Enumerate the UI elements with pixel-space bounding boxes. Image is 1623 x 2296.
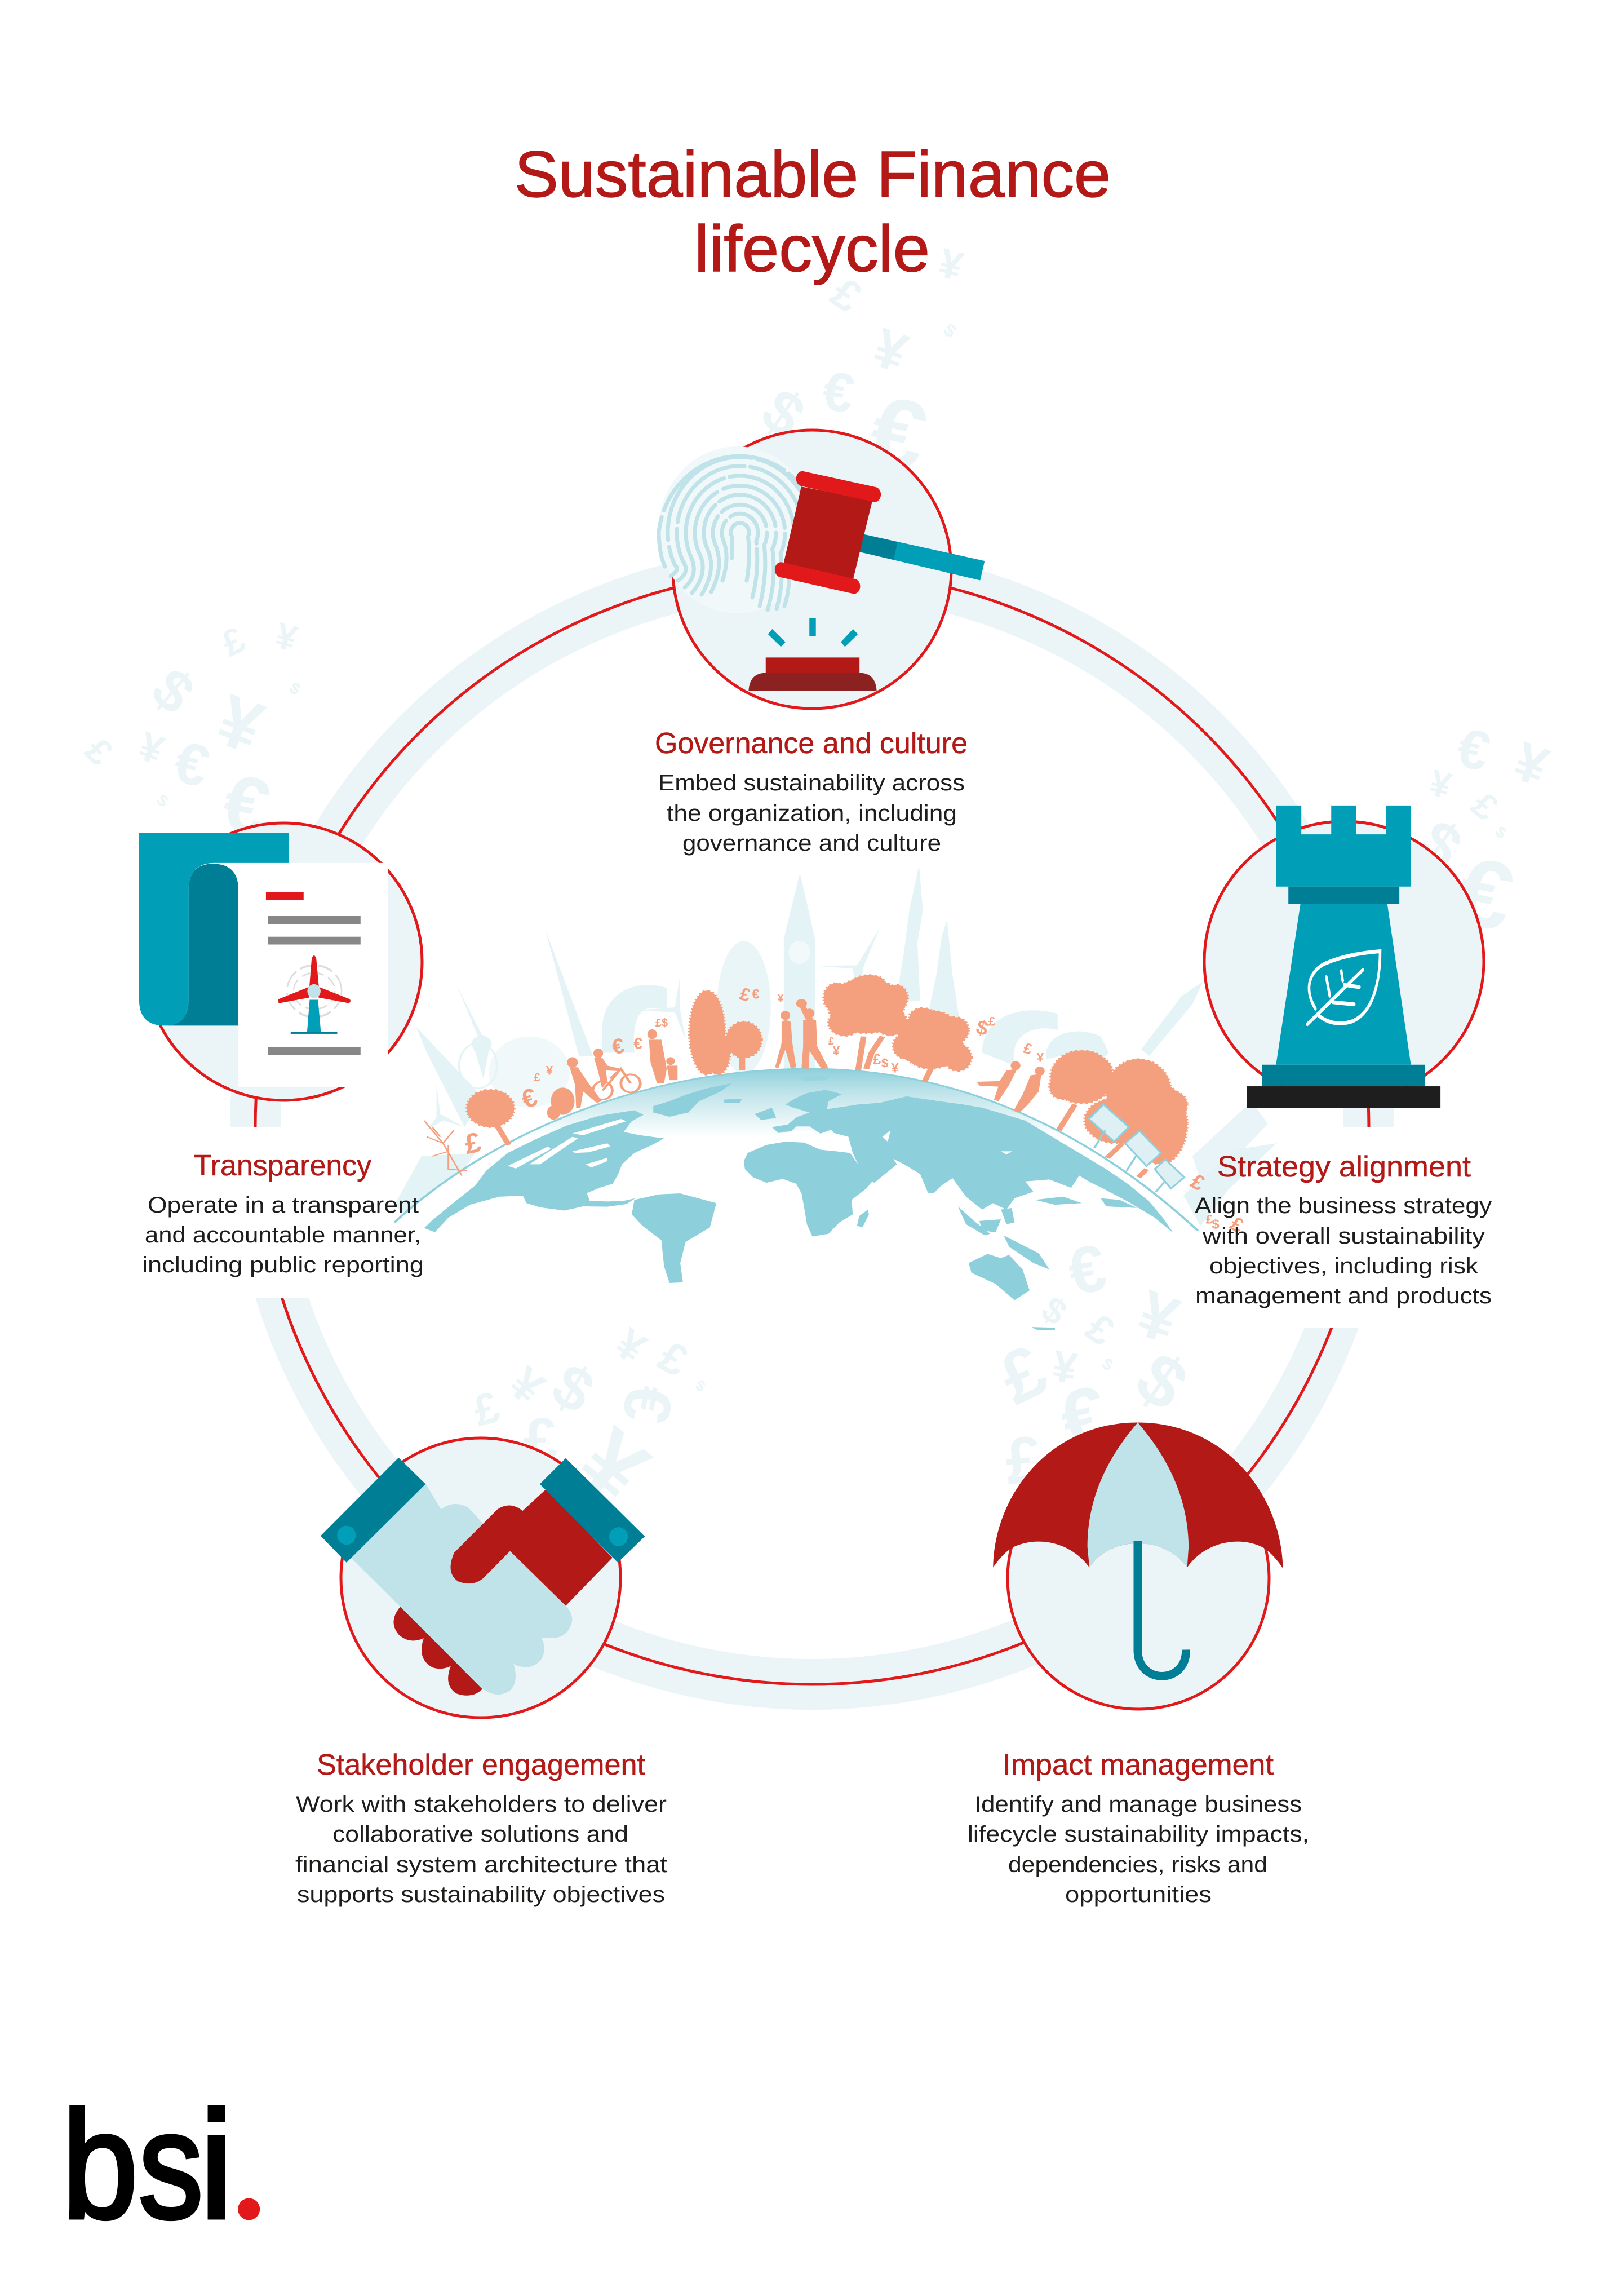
orange currency symbols: ¥ [1037, 1051, 1044, 1064]
orange currency symbols: £ [462, 1126, 484, 1160]
orange currency symbols: € [633, 1035, 642, 1052]
logo: bsi: i [199, 2081, 233, 2250]
circle [341, 1438, 620, 1718]
solar panels [1089, 1104, 1185, 1192]
background currency symbols: ¥ [271, 614, 301, 660]
orange currency symbols: ¥ [777, 992, 784, 1005]
trees [467, 975, 1187, 1164]
background currency symbols: $ [1122, 1335, 1202, 1427]
icon: fingerprint [659, 446, 815, 613]
text block: impact management [968, 1749, 1309, 1907]
icon: handshake [321, 1458, 645, 1696]
orange currency symbols: $ [881, 1056, 888, 1070]
background currency symbols: $ [693, 1376, 708, 1395]
icon: umbrella [993, 1422, 1283, 1676]
panel: governance and culture icon [659, 430, 985, 709]
circle [1008, 1448, 1269, 1709]
background currency symbols: £ [650, 1331, 697, 1386]
orange currency symbols: £ [534, 1072, 540, 1084]
background currency symbols: £ [215, 618, 251, 665]
skyline fragment behind strategy heading [1183, 1143, 1276, 1226]
background currency symbols: € [818, 359, 859, 425]
background currency symbols: € [1051, 1368, 1118, 1466]
orange currency symbols: ¥ [546, 1063, 553, 1078]
background currency symbols: € [215, 757, 277, 854]
background currency symbols: ¥ [934, 240, 968, 290]
background currency symbols: £ [1464, 784, 1506, 829]
background currency symbols: ¥ [207, 678, 273, 769]
background currency symbols: $ [1492, 823, 1510, 842]
text block: stakeholder engagement: financial system architecture that [295, 1852, 667, 1877]
orange currency symbols: $ [1212, 1216, 1220, 1232]
text block: governance and culture [655, 727, 968, 856]
background currency symbols: $ [940, 319, 960, 342]
orange currency symbols [462, 983, 1248, 1237]
circle [673, 430, 951, 709]
text block: governance and culture: Governance and culture [655, 727, 968, 760]
background currency symbols: € [167, 728, 216, 800]
background currency symbols: € [861, 375, 935, 491]
icon: gavel and sound block [748, 479, 985, 691]
text block: transparency [142, 1149, 424, 1277]
orange currency symbols: £ [1226, 1211, 1248, 1237]
orange currency symbols: £ [988, 1015, 996, 1028]
text block: governance and culture: the organization, including [667, 801, 957, 826]
circle [1204, 821, 1484, 1101]
orange currency symbols: £ [738, 983, 752, 1006]
lifecycle ring [186, 570, 1431, 1684]
panel: transparency icon [139, 823, 422, 1100]
background currency symbols: ¥ [1048, 1341, 1081, 1393]
background currency symbols: $ [1099, 1355, 1116, 1375]
background currency symbols: ¥ [499, 1356, 554, 1415]
text block: impact management: Identify and manage business [974, 1792, 1302, 1817]
text block: impact management: Impact management [1003, 1749, 1274, 1781]
background currency symbols: € [609, 1380, 688, 1428]
background currency symbols: $ [1407, 806, 1474, 883]
background currency symbols: £ [468, 1382, 504, 1436]
orange currency symbols: £$ [655, 1017, 668, 1029]
background currency symbols: $ [286, 679, 304, 699]
background currency symbols: ¥ [1506, 729, 1557, 798]
icon: chess rook with leaf [1247, 806, 1440, 1108]
text block: strategy alignment: with overall sustainability [1202, 1224, 1485, 1249]
background currency symbols: $ [140, 656, 206, 727]
background currency symbols: £ [822, 268, 871, 322]
background currency symbols [77, 240, 1557, 1524]
orange currency symbols: £ [873, 1051, 881, 1068]
background currency symbols: $ [1034, 1288, 1075, 1333]
background currency symbols: $ [750, 375, 817, 452]
background currency symbols: € [1448, 836, 1522, 952]
panel: stakeholder engagement icon [321, 1438, 645, 1718]
text block: stakeholder engagement [295, 1749, 667, 1907]
background currency symbols: $ [541, 1350, 605, 1427]
city skyline behind globe [394, 865, 1268, 1221]
text block: stakeholder engagement: collaborative solutions and [332, 1822, 628, 1847]
orange currency symbols: £ [828, 1036, 834, 1047]
orange currency symbols: € [517, 1082, 541, 1114]
panel: strategy alignment icon [1204, 806, 1484, 1108]
globe dome [394, 1069, 1198, 1231]
background currency symbols: € [1063, 1230, 1111, 1309]
background currency symbols: ¥ [1425, 762, 1456, 807]
arctic lakes and bays [508, 1119, 1012, 1169]
text block: transparency: including public reporting [142, 1253, 424, 1277]
text block: stakeholder engagement: supports sustainability objectives [297, 1882, 665, 1907]
people, trees and solar panels on horizon [424, 975, 1187, 1192]
text block: strategy alignment: objectives, including risk [1209, 1254, 1479, 1278]
title [515, 138, 1111, 285]
orange currency symbols: £ [1206, 1212, 1213, 1227]
bicycle [593, 1069, 640, 1100]
background currency symbols: £ [1078, 1305, 1122, 1355]
continents [424, 1076, 1173, 1330]
orange currency symbols: € [752, 986, 760, 1002]
orange currency symbols: ¥ [833, 1044, 840, 1058]
circle [145, 823, 422, 1100]
text block: strategy alignment: management and products [1195, 1284, 1492, 1308]
orange currency symbols: $ [974, 1015, 991, 1040]
background currency symbols: ¥ [133, 724, 169, 773]
text block: transparency: and accountable manner, [145, 1223, 421, 1247]
logo: bsi: s [139, 2080, 203, 2250]
orange currency symbols: € [610, 1034, 626, 1060]
orange currency symbols: ¥ [891, 1061, 899, 1076]
background currency symbols: € [1451, 715, 1497, 783]
people silhouettes [547, 999, 1045, 1120]
text block: stakeholder engagement: Stakeholder engagement [317, 1749, 646, 1781]
text block: stakeholder engagement: Work with stakeholders to deliver [296, 1792, 667, 1817]
background currency symbols: £ [987, 1329, 1059, 1420]
text block: strategy alignment: Align the business strategy [1195, 1193, 1492, 1218]
background currency symbols: ¥ [606, 1319, 655, 1373]
text block: impact management: opportunities [1065, 1882, 1212, 1907]
tree trunks [497, 1037, 1147, 1177]
text block: governance and culture: Embed sustainability across [658, 771, 965, 795]
background currency symbols: £ [1003, 1422, 1045, 1498]
background currency symbols: ¥ [1128, 1276, 1188, 1358]
text block: impact management: dependencies, risks and [1008, 1852, 1267, 1877]
background currency symbols: $ [153, 791, 171, 811]
orange currency symbols: £ [1022, 1039, 1034, 1058]
background currency symbols: ¥ [558, 1408, 667, 1524]
background currency symbols: £ [77, 729, 121, 773]
background currency symbols: £ [523, 1406, 558, 1475]
panel: impact management icon [993, 1422, 1283, 1709]
text block: strategy alignment: Strategy alignment [1217, 1151, 1471, 1183]
bare tree [424, 1121, 467, 1175]
icon: leaf [1307, 951, 1380, 1024]
title: Sustainable Finance [515, 138, 1111, 211]
text block: strategy alignment [1195, 1151, 1492, 1308]
logo: bsi [62, 2080, 260, 2250]
orange currency symbols: £ [1186, 1170, 1209, 1196]
text block: transparency: Transparency [194, 1149, 371, 1182]
icon: wind turbine [278, 955, 351, 1034]
background currency symbols: ¥ [866, 316, 916, 384]
logo: bsi: b [62, 2080, 138, 2250]
globe [394, 1069, 1198, 1330]
icon: report document [139, 833, 388, 1087]
text block: governance and culture: governance and culture [682, 831, 941, 856]
text block: impact management: lifecycle sustainability impacts, [968, 1822, 1309, 1847]
text block: transparency: Operate in a transparent [148, 1193, 419, 1218]
title: lifecycle [694, 212, 930, 285]
